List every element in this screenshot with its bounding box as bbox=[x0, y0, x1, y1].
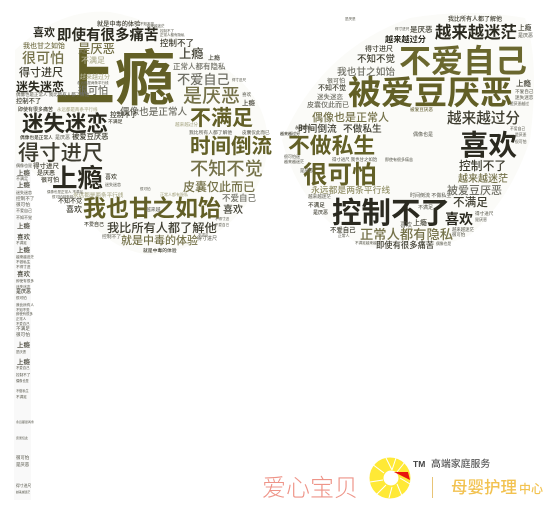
word: 喜欢: 喜欢 bbox=[33, 25, 55, 39]
word: 上瘾 main: 上瘾 bbox=[55, 46, 175, 113]
small words: right lens: 是厌恶越过 bbox=[510, 101, 529, 106]
word: 不满足 right: 不满足 bbox=[453, 195, 488, 209]
word: 控制不了 upper: 控制不了 bbox=[160, 38, 194, 48]
left temple column: 喜欢 bbox=[17, 269, 30, 278]
small words: left lens: 偶像也是正常人 我比所有人都了解他 bbox=[16, 91, 90, 98]
left temple column: 很可怕 bbox=[16, 454, 30, 461]
word: 迷失迷恋 medium: 迷失迷恋 bbox=[16, 79, 64, 94]
small words: left lens: 控制不了 bbox=[160, 28, 174, 33]
small words: right lens: 是厌恶 bbox=[475, 216, 487, 222]
small words: left lens: 不满足 bbox=[198, 232, 209, 237]
word: 喜欢 small: 喜欢 bbox=[223, 203, 243, 216]
small words: left lens: 很可怕越来越 bbox=[52, 194, 73, 199]
logo: 爱心宝贝 brand bbox=[262, 457, 543, 502]
small words: right lens: 得寸进尺 我也甘之如饴 bbox=[332, 156, 378, 163]
word: 很可怕 large: 很可怕 bbox=[303, 161, 376, 189]
small words: right lens: 迷失迷恋 bbox=[317, 92, 344, 101]
small words: right lens: 上瘾 bbox=[516, 78, 531, 88]
small words: left lens: 上瘾 bbox=[242, 98, 256, 107]
small words: left lens: 很可怕 bbox=[140, 186, 151, 191]
small words: left lens: 永远都是两条平行线 bbox=[57, 106, 98, 113]
word cloud: left lens bbox=[16, 20, 272, 494]
service name: 母婴护理 bbox=[451, 478, 517, 497]
small words: left lens: 越来越过分 bbox=[80, 73, 110, 81]
small words: right lens: 即使有很多痛苦 bbox=[385, 156, 413, 162]
word: 我也甘之如饴: 我也甘之如饴 bbox=[83, 195, 221, 221]
left temple column: 上瘾 bbox=[17, 221, 30, 230]
word: 即使有很多痛苦: 即使有很多痛苦 bbox=[376, 240, 434, 250]
word cloud: right lens bbox=[280, 15, 534, 250]
icon: yellow sun aperture bbox=[370, 458, 410, 498]
word: 永远都是两条平行线: 永远都是两条平行线 bbox=[311, 184, 390, 195]
small words: right lens: 时间倒流 不做私生 bbox=[410, 192, 451, 199]
left temple column: 是厌恶 bbox=[16, 288, 31, 295]
small words: right lens: 很可怕 bbox=[327, 77, 345, 85]
small words: left lens: 偶像也是正常人 bbox=[20, 134, 53, 141]
small words: left lens: 很可怕 bbox=[41, 176, 59, 184]
word: 得寸进尺: 得寸进尺 bbox=[365, 44, 393, 53]
small words: right lens: 越来越迷茫 bbox=[452, 226, 475, 233]
small words: right lens: 是厌恶 bbox=[300, 168, 314, 174]
left temple column: 不做私生 bbox=[16, 388, 30, 393]
left temple column: 越来越迷茫 bbox=[16, 254, 34, 259]
small words: left lens: 是厌恶 bbox=[37, 170, 55, 177]
word: 越来越迷茫 right: 越来越迷茫 bbox=[458, 172, 508, 185]
left temple column: 控制不了 bbox=[16, 372, 31, 377]
small words: right lens: 不满足 bbox=[308, 201, 325, 209]
left temple column: 不爱自己 bbox=[16, 321, 30, 326]
word: 正常人都有隐私: 正常人都有隐私 bbox=[173, 61, 226, 71]
left temple column: 我比所有人 bbox=[16, 302, 34, 307]
small words: left lens: 我比所有人都了解他 bbox=[189, 129, 232, 136]
small words: right lens: 上瘾 bbox=[518, 23, 532, 32]
small words: right lens: 喜欢 bbox=[400, 221, 412, 229]
left temple column: 得寸进尺 bbox=[16, 483, 31, 488]
small words: right lens: 正常人 bbox=[338, 233, 350, 238]
small words: left lens: 控制不了 bbox=[102, 233, 121, 240]
word: 不满足 large: 不满足 bbox=[190, 107, 253, 130]
small words: right lens: 上瘾 bbox=[413, 218, 427, 227]
small words: left lens: 即使有很多痛苦 bbox=[18, 106, 53, 113]
small words: left lens: 不知不觉 bbox=[58, 197, 82, 205]
small words: right lens: 是厌恶 bbox=[518, 32, 533, 39]
small words: left lens: 不爱自己 bbox=[215, 222, 229, 227]
left temple column: 不满足 bbox=[16, 394, 27, 399]
left temple column: 偶像也是 bbox=[16, 378, 30, 383]
left temple column: 喜欢 bbox=[17, 232, 30, 241]
word: 上瘾 upper right: 上瘾 bbox=[179, 46, 204, 61]
small words: right lens: 迷失迷恋 bbox=[515, 94, 534, 101]
small words: left lens: 喜欢 bbox=[105, 173, 117, 181]
small words: right lens bbox=[280, 15, 534, 246]
small words: left lens: 不满足 bbox=[81, 55, 105, 65]
small words: right lens: 偶像也是 bbox=[413, 131, 433, 138]
left temple column: 不知不觉 bbox=[16, 214, 32, 220]
small words: right lens: 得寸进尺 bbox=[475, 210, 494, 217]
word: 是厌恶 large: 是厌恶 bbox=[183, 86, 240, 107]
small words: right lens: 越来越迷茫 bbox=[308, 193, 331, 200]
left temple column: 皮囊仅此 bbox=[16, 435, 28, 440]
left temple column: 上瘾 bbox=[17, 180, 30, 189]
word: 正常人都有隐私: 正常人都有隐私 bbox=[360, 227, 453, 242]
word: 迷失迷恋 large: 迷失迷恋 bbox=[22, 111, 108, 136]
left temple column: 迷失迷恋 bbox=[16, 189, 32, 195]
small words: right lens: 很可怕 bbox=[452, 231, 466, 238]
word: 越来越过分 upper: 越来越过分 bbox=[385, 34, 426, 44]
small words: left lens: 永远都是两条平行线 bbox=[73, 191, 124, 199]
small words: left lens: 就是中毒的体验 bbox=[143, 247, 177, 254]
left temple column: 不爱自己 bbox=[16, 207, 32, 213]
small words: right lens: 越来越过分 bbox=[280, 130, 300, 136]
small words: left lens: 皮囊仅此而已 bbox=[242, 129, 270, 136]
small words: left lens: 是厌恶 bbox=[55, 134, 70, 141]
small words: left lens: 不得寸进 bbox=[215, 216, 229, 221]
left temple column: 是厌恶 bbox=[16, 462, 30, 468]
word: 我也甘之如饴: 我也甘之如饴 bbox=[337, 65, 395, 78]
word: 不爱自己: 不爱自己 bbox=[177, 72, 230, 87]
left temple column: 上瘾 bbox=[17, 245, 30, 254]
left temple column: 上瘾 bbox=[17, 357, 30, 366]
divider bbox=[432, 477, 433, 498]
small words: right lens: 被爱豆厌恶 bbox=[410, 106, 433, 113]
small words: right lens: 不满足 bbox=[418, 204, 433, 211]
word: 被爱豆厌恶 large: 被爱豆厌恶 bbox=[348, 74, 513, 111]
word: 控制不了 large: 控制不了 bbox=[332, 197, 450, 230]
small words: left lens: 上瘾 bbox=[208, 54, 220, 62]
small words: right lens: 不满足越来越 bbox=[355, 240, 377, 245]
left temple column: 不满足 bbox=[16, 325, 30, 332]
service suffix: 中心 bbox=[519, 481, 543, 496]
word: 很可怕 gray: 很可怕 bbox=[78, 84, 108, 97]
left temple column: 上瘾 bbox=[17, 340, 30, 349]
small words: right lens: 很可怕 bbox=[515, 139, 527, 144]
small words: right lens: 皮囊仅此而已 bbox=[307, 100, 349, 109]
word: 即使有很多痛苦: 即使有很多痛苦 bbox=[57, 26, 158, 44]
small words: left lens: 喜欢 bbox=[66, 204, 82, 214]
small words: left lens bbox=[16, 20, 270, 254]
small words: right lens: 是厌恶 bbox=[515, 132, 527, 137]
small words: right lens: 不爱自己 bbox=[510, 126, 525, 131]
word: 是厌恶 olive: 是厌恶 bbox=[78, 42, 115, 56]
word: 越来越过分 lower: 越来越过分 bbox=[447, 110, 520, 127]
small words: right lens: 不爱自己 bbox=[330, 225, 356, 234]
small words: left lens: 越来越过分 bbox=[175, 121, 198, 128]
small words: right lens: 偶像也是 bbox=[436, 241, 451, 246]
left temple column: 不做私生 bbox=[16, 259, 31, 264]
small words: right lens: 是厌恶 bbox=[345, 16, 356, 21]
tagline: 高端家庭服务 bbox=[431, 457, 490, 470]
icon: red wedge bbox=[394, 472, 410, 480]
left temple column: 很可怕 bbox=[16, 331, 30, 338]
left temple column: 迷失迷恋 bbox=[16, 284, 31, 289]
word: 是厌恶 top: 是厌恶 bbox=[410, 25, 433, 34]
word: 不做私生 small: 不做私生 bbox=[343, 122, 382, 135]
small words: right lens: 越来越迷茫 bbox=[284, 158, 304, 164]
left temple column: 越来越迷茫 bbox=[16, 490, 30, 494]
small words: left lens: 永远都是两条平行线 bbox=[77, 80, 109, 85]
small words: right lens: 不爱自己 bbox=[515, 88, 534, 95]
small words: left lens: 正常人都有隐私 bbox=[160, 191, 188, 197]
small words: left lens: 就是中毒的体验 bbox=[97, 20, 141, 28]
small words: right lens: 是厌恶 bbox=[313, 209, 328, 216]
word: 控制不了 right: 控制不了 bbox=[459, 159, 506, 173]
left temple column: 即使有很多 bbox=[16, 278, 34, 283]
word: 不做私生 large: 不做私生 bbox=[288, 133, 375, 158]
small words: left lens: 得寸进尺 bbox=[197, 235, 217, 242]
word: 偶像也是正常人: 偶像也是正常人 bbox=[120, 106, 188, 118]
small words: left lens: 我也甘之如饴 bbox=[23, 41, 65, 50]
word: 不爱自己 large: 不爱自己 bbox=[399, 43, 527, 79]
small words: left lens: 控制不了 bbox=[16, 96, 41, 105]
word: 不爱自己 small: 不爱自己 bbox=[222, 193, 257, 203]
left temple column: 正常人 bbox=[16, 316, 27, 321]
word: 喜欢 large: 喜欢 bbox=[460, 130, 517, 162]
small words: left lens: 得寸进尺 bbox=[33, 161, 60, 170]
left temple column: 很可怕 bbox=[16, 201, 30, 208]
small words: left lens: 被爱豆厌恶 bbox=[72, 132, 108, 141]
small words: left lens: 控制不了 bbox=[110, 110, 137, 119]
small words: right lens: 不知不觉 bbox=[318, 83, 346, 92]
word: 越来越迷茫: 越来越迷茫 bbox=[435, 24, 517, 42]
left temple column: 不满足 bbox=[16, 175, 28, 181]
left temple column: 不知不觉 bbox=[16, 307, 30, 312]
left temple column: 是厌恶 bbox=[16, 349, 27, 354]
small words: left lens: 正常人都有隐私 bbox=[160, 32, 185, 37]
word: 时间倒流: 时间倒流 bbox=[298, 122, 337, 135]
word: 得寸进尺: 得寸进尺 bbox=[19, 65, 63, 79]
left temple column: 很可怕 bbox=[16, 295, 27, 300]
word: 不知不觉: 不知不觉 bbox=[357, 53, 396, 65]
word: 就是中毒的体验: 就是中毒的体验 bbox=[121, 233, 198, 247]
word: 很可怕: 很可怕 bbox=[22, 50, 64, 66]
small words: right lens: 永远都是 bbox=[295, 124, 311, 130]
small words: left lens: 得寸进尺 bbox=[232, 77, 246, 82]
word: 时间倒流: 时间倒流 bbox=[190, 135, 272, 158]
left temple column: 不得寸进 bbox=[16, 264, 31, 269]
brand name: 爱心宝贝 bbox=[262, 475, 358, 502]
word: 不知不觉: 不知不觉 bbox=[190, 159, 263, 179]
trademark: TM bbox=[413, 459, 425, 469]
small words: left lens: 偶像也是正常人 不满足 bbox=[47, 189, 83, 194]
word: 喜欢 lower: 喜欢 bbox=[445, 211, 473, 227]
small words: left lens: 越来越 bbox=[146, 206, 161, 213]
left temple column: 不爱自己 bbox=[16, 365, 30, 370]
left temple column: 上瘾 bbox=[17, 168, 30, 177]
left temple column: 永远都是两条 bbox=[16, 419, 34, 424]
small words: left lens: 喜欢 bbox=[242, 91, 252, 98]
left temple column bbox=[16, 162, 35, 494]
small words: right lens: 我比所有人都了解他 bbox=[448, 15, 502, 23]
word: 偶像也是正常人: 偶像也是正常人 bbox=[312, 110, 389, 124]
small words: left lens: 不爱自己 bbox=[84, 221, 104, 228]
word: 得寸进尺 large: 得寸进尺 bbox=[18, 141, 103, 165]
left temple column: 偶像也是 bbox=[16, 162, 32, 168]
small words: left lens: 迷失迷恋 bbox=[105, 181, 121, 187]
left temple column: 即使有很多 bbox=[16, 311, 34, 316]
small words: right lens: 很可怕迷 bbox=[284, 153, 300, 159]
small words: right lens: 得寸进尺 bbox=[395, 26, 410, 31]
word: 上瘾 secondary: 上瘾 bbox=[52, 165, 103, 193]
small words: left lens: 不满足 bbox=[108, 118, 123, 125]
left temple column: 不满足 bbox=[16, 240, 27, 245]
word: 我比所有人都了解他: 我比所有人都了解他 bbox=[107, 220, 217, 235]
small words: left lens: 越来越迷茫 bbox=[147, 23, 165, 28]
small words: left lens: 不知不觉 bbox=[140, 21, 154, 26]
left temple column: 控制不了 bbox=[16, 195, 35, 202]
word: 皮囊仅此而已: 皮囊仅此而已 bbox=[183, 179, 255, 194]
word: 被爱豆厌恶 right: 被爱豆厌恶 bbox=[447, 183, 502, 197]
